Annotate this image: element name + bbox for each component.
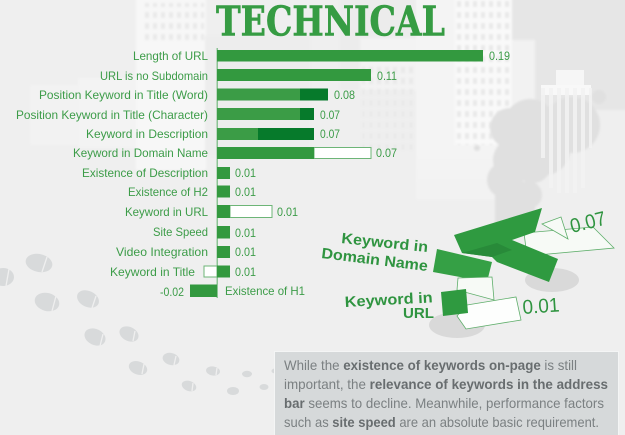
label: Keyword in URL: Keyword in bbox=[344, 289, 433, 311]
label: Keyword in Domain Name: Keyword in bbox=[341, 230, 429, 256]
bar: Keyword in URL: Keyword in URL bbox=[125, 205, 208, 219]
bar: Existence of H2: Existence of H2 bbox=[128, 185, 208, 199]
bar: URL is no Subdomain: 0.11 bbox=[377, 69, 397, 83]
bar: Position Keyword in Title (Character) bbox=[16, 108, 340, 122]
bar: Site Speed: 0.01 bbox=[235, 226, 256, 240]
callout text box: While the existence of keywords on-page is still bbox=[284, 357, 577, 373]
value: 0.07: 0.07 bbox=[568, 208, 608, 238]
bar: Keyword in Domain Name: Keyword in Domain Name bbox=[73, 146, 208, 160]
bar: Keyword in Description: Keyword in Description bbox=[86, 127, 208, 141]
callout text box bbox=[274, 352, 618, 435]
bar: URL is no Subdomain bbox=[100, 69, 397, 83]
bar: Existence of Description: 0.01 bbox=[235, 166, 256, 180]
bar: Existence of H2: 0.01 bbox=[235, 185, 256, 199]
broken bar: Keyword in URL bbox=[441, 277, 521, 329]
bar: Position Keyword in Title (Character): Position Keyword in Title (Character) bbox=[16, 108, 208, 122]
bar: URL is no Subdomain: URL is no Subdomain bbox=[100, 69, 208, 83]
bar: Position Keyword in Title (Word) bbox=[39, 88, 355, 102]
bar: Position Keyword in Title (Word): 0.08 bbox=[334, 88, 355, 102]
bar: Video Integration: Video Integration bbox=[116, 245, 208, 259]
bar: Existence of Description: Existence of Description bbox=[82, 166, 208, 180]
bar: Position Keyword in Title (Character): 0.07 bbox=[320, 108, 340, 122]
bar chart bbox=[16, 48, 510, 299]
callout text box: such as site speed are an absolute basic requirement. bbox=[284, 414, 599, 430]
bar: Keyword in URL: 0.01 bbox=[277, 205, 298, 219]
bar: Length of URL: 0.19 bbox=[489, 49, 510, 63]
label: Keyword in Domain Name: Domain Name bbox=[321, 245, 429, 275]
bar: Keyword in Domain Name: 0.07 bbox=[376, 146, 397, 160]
bar: Position Keyword in Title (Word): Position Keyword in Title (Word) bbox=[39, 88, 208, 102]
bar: Keyword in Title bbox=[110, 265, 256, 279]
bar: Length of URL bbox=[133, 49, 510, 63]
bar: Keyword in Description bbox=[86, 127, 340, 141]
bar: Keyword in Description: 0.07 bbox=[320, 127, 340, 141]
bar: Existence of H1 bbox=[160, 284, 305, 299]
bar: Keyword in URL bbox=[125, 205, 298, 219]
bar: Keyword in Title: Keyword in Title bbox=[110, 265, 195, 279]
footprints bbox=[0, 251, 278, 395]
bar: Existence of H2 bbox=[128, 185, 256, 199]
bar: Existence of H1: Existence of H1 bbox=[225, 284, 305, 298]
shadows bbox=[429, 268, 579, 338]
illustration: broken bars callout bbox=[321, 208, 614, 338]
bar: Length of URL: Length of URL bbox=[133, 49, 208, 63]
chart axis line bbox=[216, 48, 218, 298]
bar: Keyword in Title: 0.01 bbox=[235, 265, 256, 279]
bar: Video Integration bbox=[116, 245, 256, 259]
smoke cloud and tower bbox=[474, 70, 606, 225]
value: 0.01: 0.01 bbox=[522, 294, 560, 319]
bar: Site Speed: Site Speed bbox=[153, 225, 208, 239]
bar: Keyword in Domain Name bbox=[73, 146, 397, 160]
bar: Existence of H1: -0.02 bbox=[160, 285, 184, 299]
callout text box: important, the relevance of keywords in the address bbox=[284, 376, 608, 392]
broken bar: Keyword in Domain Name bbox=[433, 208, 614, 282]
label: Keyword in Domain Name bbox=[321, 230, 429, 275]
callout text box: bar seems to decline. Meanwhile, performance factors bbox=[284, 395, 604, 411]
label: Keyword in URL: URL bbox=[403, 305, 434, 322]
bar: Video Integration: 0.01 bbox=[235, 245, 256, 259]
label: Keyword in URL bbox=[344, 289, 434, 322]
bar: Site Speed bbox=[153, 225, 256, 240]
